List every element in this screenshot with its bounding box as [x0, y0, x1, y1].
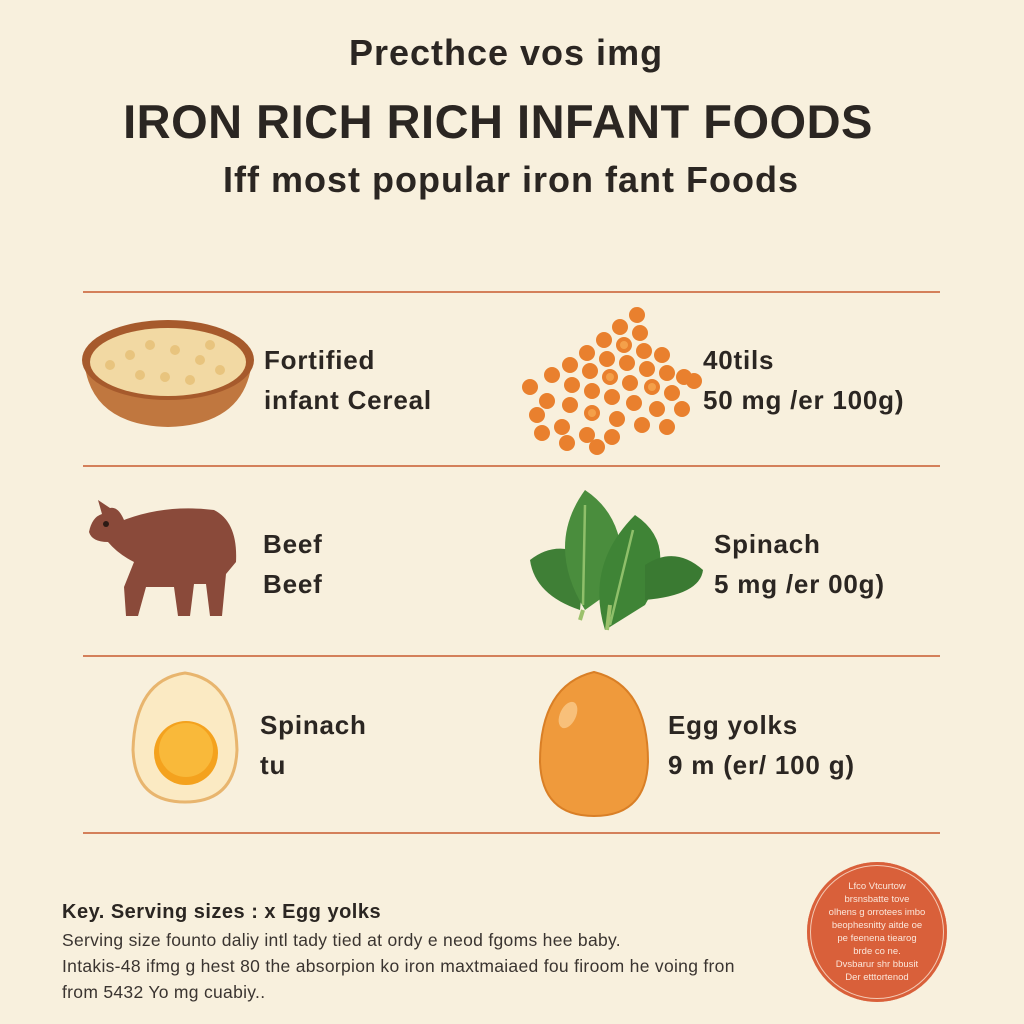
callout circle: Lfco Vtcurtow — [848, 881, 906, 892]
key text block — [62, 901, 735, 1002]
label: egg yolks — [668, 710, 855, 780]
icon: cereal bowl — [82, 320, 254, 427]
callout circle: brsnsbatte tove — [844, 894, 909, 905]
callout circle: Der etttortenod — [845, 972, 909, 983]
label: egg yolks: Egg yolks — [668, 710, 798, 740]
icon: lentils — [522, 307, 702, 455]
callout circle: olhens g orrotees imbo — [829, 907, 925, 918]
label: beef: Beef — [263, 569, 323, 599]
label: spinach — [714, 529, 885, 599]
label: beef — [263, 529, 323, 599]
callout circle — [807, 862, 947, 1002]
label: fortified cereal: Fortified — [264, 345, 375, 375]
icon: halved egg — [132, 672, 238, 804]
key text block: Serving size founto daliy intl tady tied at ordy e neod fgoms hee baby. — [62, 930, 621, 950]
callout circle: pe feenena tiearog — [837, 933, 917, 944]
kicker heading: Precthce vos img — [349, 32, 663, 73]
key text block: from 5432 Yo mg cuabiy.. — [62, 982, 265, 1002]
label: egg yolks: 9 m (er/ 100 g) — [668, 750, 855, 780]
label: spinach tu — [260, 710, 367, 780]
label: lentils — [703, 345, 904, 415]
key text block: Intakis-48 ifmg g hest 80 the absorpion ko iron maxtmaiaed fou firoom he voing fron — [62, 956, 735, 976]
label: spinach: Spinach — [714, 529, 821, 559]
icon: whole egg — [539, 671, 649, 817]
label: fortified cereal: infant Cereal — [264, 385, 432, 415]
callout circle: Dvsbarur shr bbusit — [836, 959, 918, 970]
label: lentils: 50 mg /er 100g) — [703, 385, 904, 415]
callout circle: brde co ne. — [853, 946, 901, 957]
icon: beef cow — [89, 500, 236, 616]
callout circle: beophesnitty aitde oe — [832, 920, 922, 931]
label: fortified cereal — [264, 345, 432, 415]
label: spinach tu: tu — [260, 750, 286, 780]
title: IRON RICH RICH INFANT FOODS — [123, 95, 873, 148]
subtitle: Iff most popular iron fant Foods — [223, 159, 799, 200]
label: spinach: 5 mg /er 00g) — [714, 569, 885, 599]
label: beef: Beef — [263, 529, 323, 559]
label: lentils: 40tils — [703, 345, 774, 375]
label: spinach tu: Spinach — [260, 710, 367, 740]
icon: spinach — [530, 490, 703, 630]
key text block: Key. Serving sizes : x Egg yolks — [62, 901, 381, 923]
